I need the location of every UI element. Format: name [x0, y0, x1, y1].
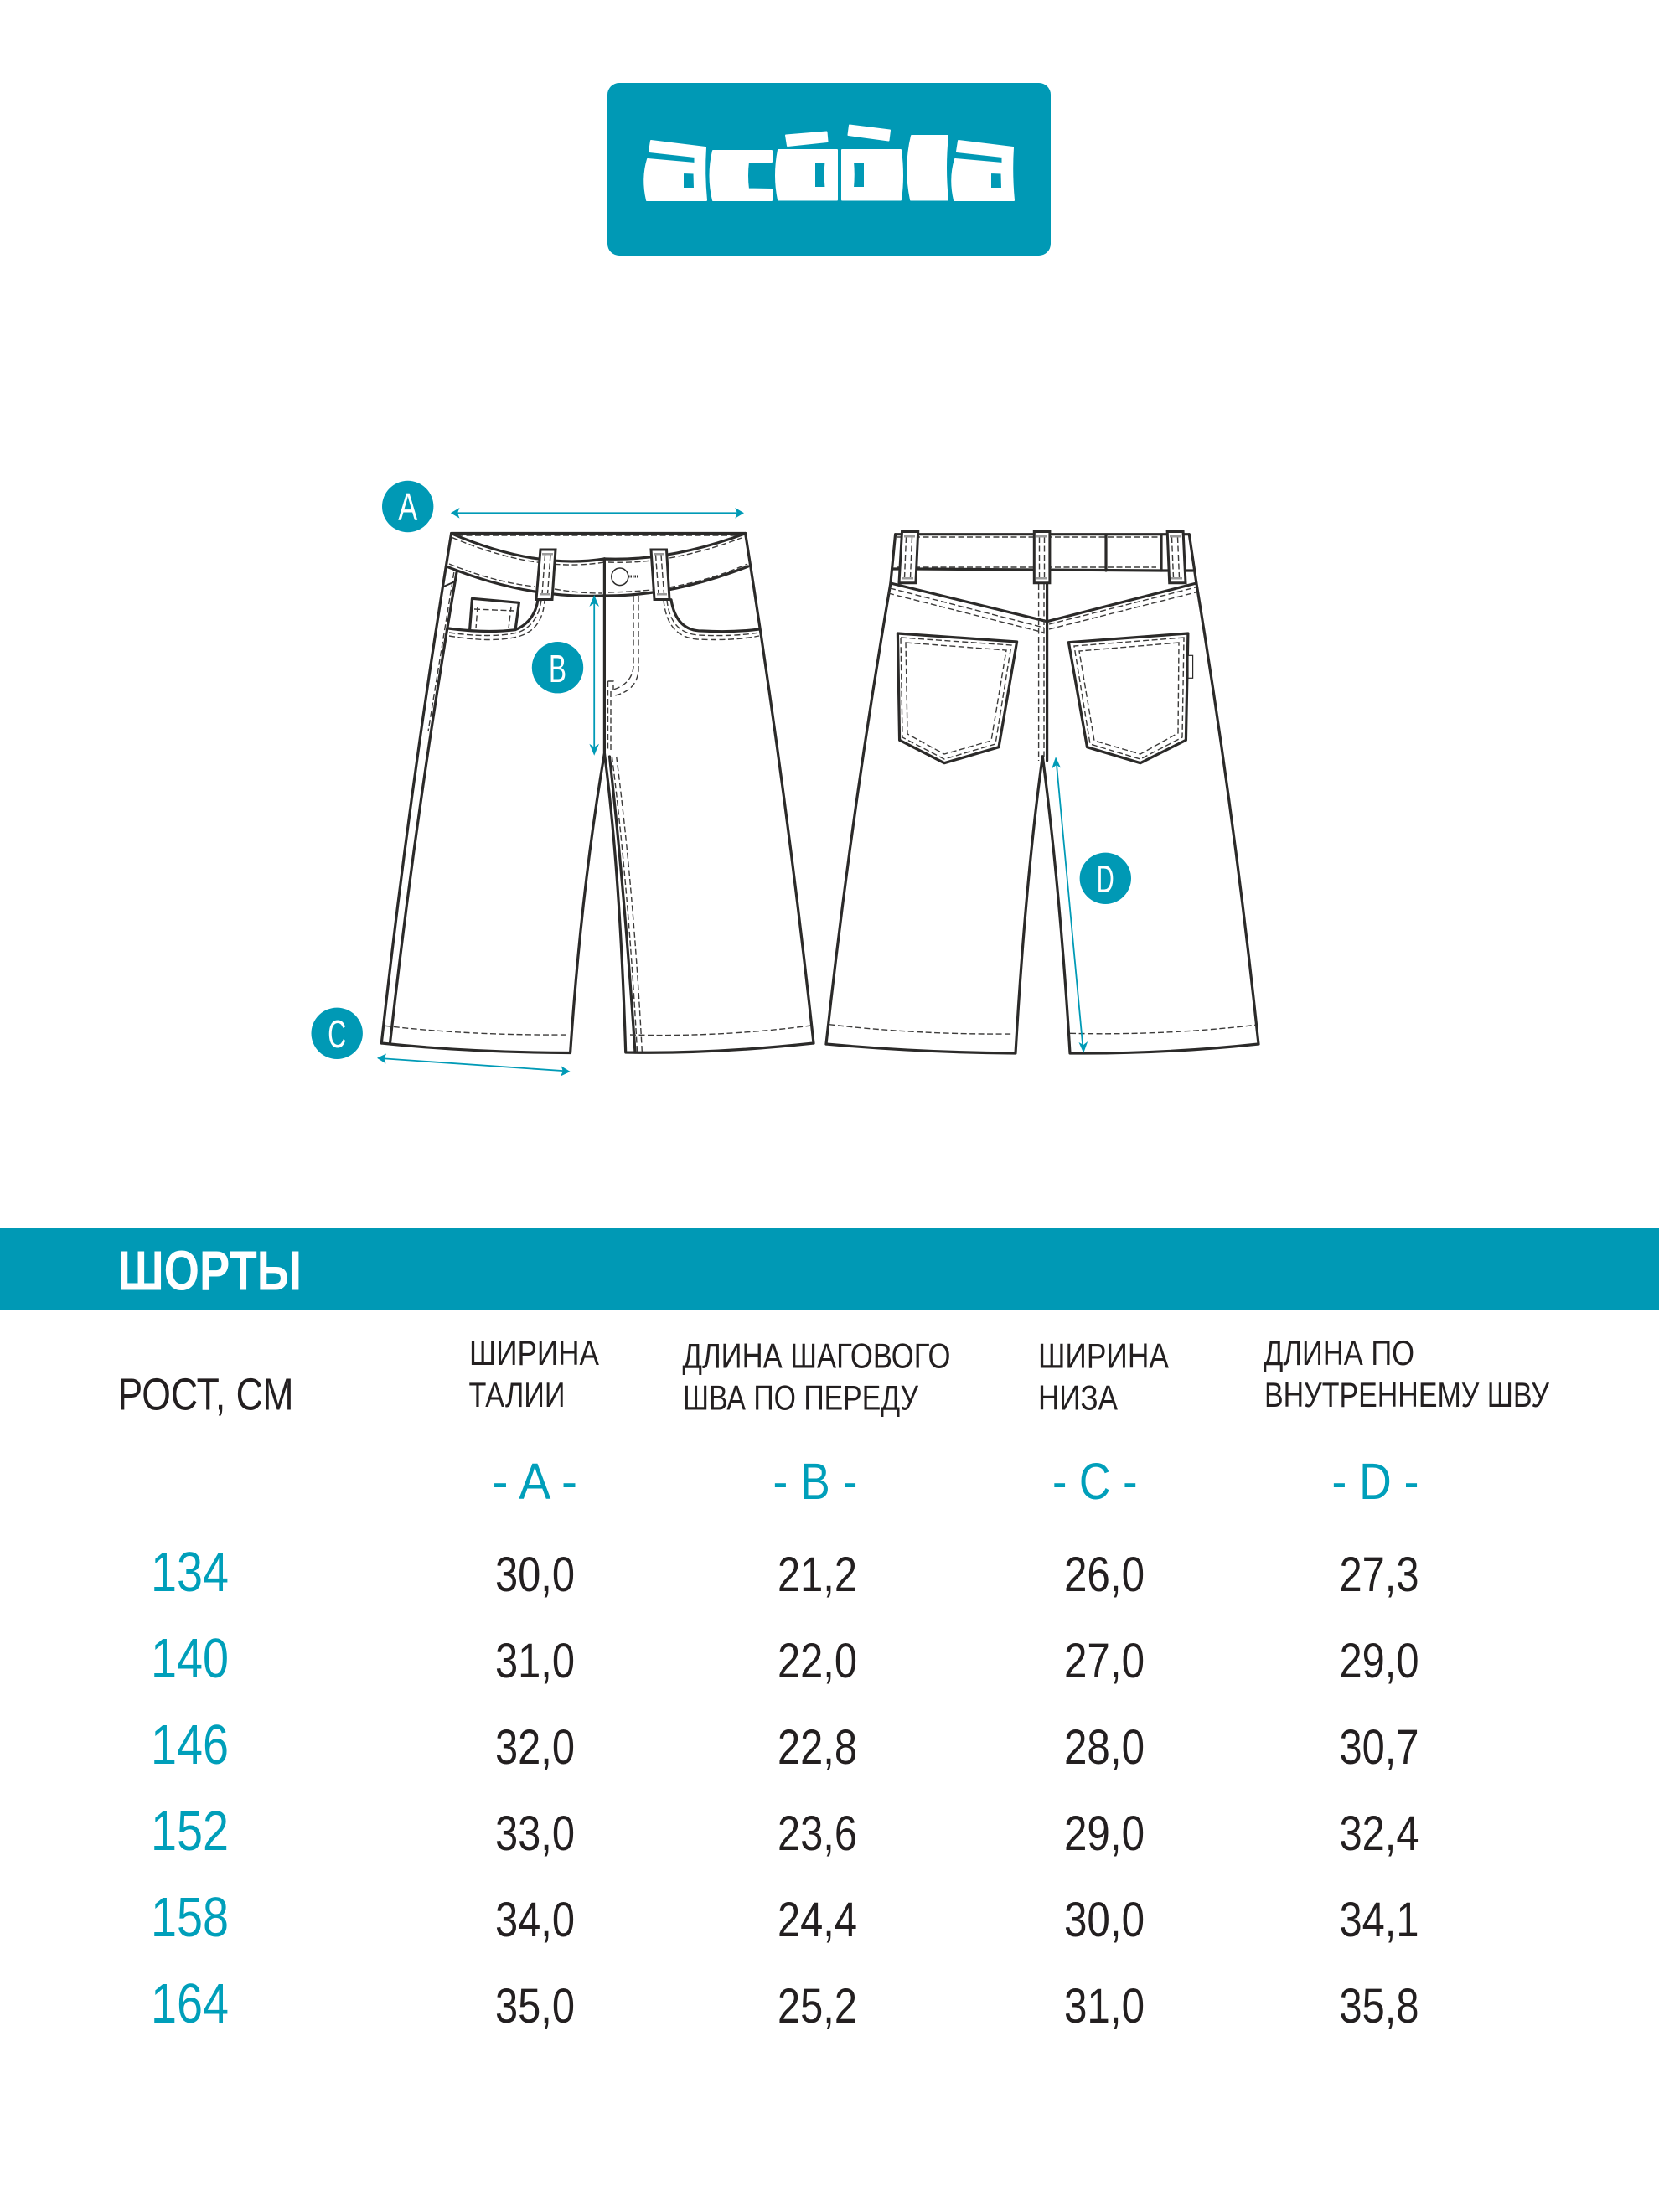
label tag	[1188, 655, 1193, 678]
yoke and center seam	[888, 583, 1196, 761]
measurement A	[382, 481, 744, 532]
row 140: 27,0	[1064, 1634, 1145, 1688]
row 140: 29,0	[1339, 1634, 1419, 1688]
row 152: 152	[151, 1800, 229, 1863]
left pocket and coin pocket	[448, 598, 545, 640]
column heading: hem width: ШИРИНА	[1038, 1336, 1169, 1375]
column heading: hem width	[1038, 1336, 1169, 1417]
height column heading: РОСТ, СМ	[117, 1369, 293, 1419]
row 140: 31,0	[495, 1634, 575, 1688]
column letters A B C D: - B -	[773, 1453, 858, 1510]
row 164: 35,8	[1339, 1979, 1419, 2034]
row 146: 22,8	[778, 1720, 857, 1775]
column heading: inseam	[1264, 1333, 1549, 1414]
side seams and outer edges	[381, 533, 814, 1043]
row 152: 33,0	[495, 1806, 575, 1861]
shorts front view	[381, 533, 814, 1052]
row 158	[151, 1886, 1419, 1949]
row 146	[151, 1713, 1419, 1776]
back outer edges	[826, 535, 1258, 1044]
shorts back view	[826, 531, 1258, 1053]
measurement C: C	[328, 1012, 346, 1056]
back left pocket	[897, 633, 1017, 763]
row 140: 22,0	[778, 1634, 857, 1688]
title band	[0, 1228, 1659, 1310]
column letters A B C D: - C -	[1052, 1453, 1138, 1510]
row 134: 134	[151, 1541, 229, 1604]
measurement C	[312, 1008, 571, 1076]
belt loops front	[536, 550, 669, 600]
title band: ШОРТЫ	[118, 1239, 302, 1302]
column heading: front rise	[682, 1336, 950, 1417]
right pocket	[664, 600, 759, 640]
waistband front	[447, 533, 748, 596]
row 140	[151, 1627, 1419, 1690]
row 152	[151, 1800, 1419, 1863]
row 134: 30,0	[495, 1548, 575, 1602]
legs and hem	[381, 753, 814, 1052]
row 152: 23,6	[778, 1806, 857, 1861]
row 164: 164	[151, 1972, 229, 2035]
column heading: waist width: ШИРИНА	[469, 1333, 599, 1372]
row 158: 24,4	[778, 1893, 857, 1947]
row 158: 158	[151, 1886, 229, 1949]
row 152: 32,4	[1339, 1806, 1419, 1861]
column heading: inseam: ДЛИНА ПО	[1264, 1333, 1414, 1372]
row 164	[151, 1972, 1419, 2035]
row 158: 34,0	[495, 1893, 575, 1947]
column heading: front rise: ШВА ПО ПЕРЕДУ	[683, 1377, 918, 1417]
row 146: 28,0	[1064, 1720, 1145, 1775]
column letters A B C D: - D -	[1332, 1453, 1419, 1510]
back right pocket	[1068, 633, 1188, 763]
column heading: inseam: ВНУТРЕННЕМУ ШВУ	[1264, 1375, 1549, 1414]
row 158: 34,1	[1339, 1893, 1419, 1947]
row 164: 31,0	[1064, 1979, 1145, 2034]
row 158: 30,0	[1064, 1893, 1145, 1947]
measurement D: D	[1097, 857, 1114, 901]
row 134: 27,3	[1339, 1548, 1419, 1602]
column heading: waist width: ТАЛИИ	[469, 1375, 565, 1414]
row 152: 29,0	[1064, 1806, 1145, 1861]
measurement A: A	[398, 485, 417, 529]
belt loops back	[899, 531, 1186, 583]
logo: acoola	[607, 83, 1051, 256]
center fly	[604, 559, 638, 752]
legs and hem back	[826, 757, 1258, 1053]
column heading: hem width: НИЗА	[1038, 1377, 1118, 1417]
row 146: 32,0	[495, 1720, 575, 1775]
row 134	[151, 1541, 1419, 1604]
waistband back	[892, 535, 1193, 571]
column heading: front rise: ДЛИНА ШАГОВОГО	[682, 1336, 950, 1375]
measurement B: B	[549, 647, 566, 690]
measurement B	[532, 595, 599, 756]
row 140: 140	[151, 1627, 229, 1690]
row 146: 146	[151, 1713, 229, 1776]
column letters A B C D: - A -	[493, 1453, 577, 1510]
row 146: 30,7	[1339, 1720, 1419, 1775]
column heading: waist width	[469, 1333, 599, 1414]
button	[612, 568, 638, 586]
column letters A B C D	[493, 1453, 1419, 1510]
measurement D	[1052, 757, 1131, 1053]
row 134: 21,2	[778, 1548, 857, 1602]
row 164: 35,0	[495, 1979, 575, 2034]
row 134: 26,0	[1064, 1548, 1145, 1602]
row 164: 25,2	[778, 1979, 857, 2034]
